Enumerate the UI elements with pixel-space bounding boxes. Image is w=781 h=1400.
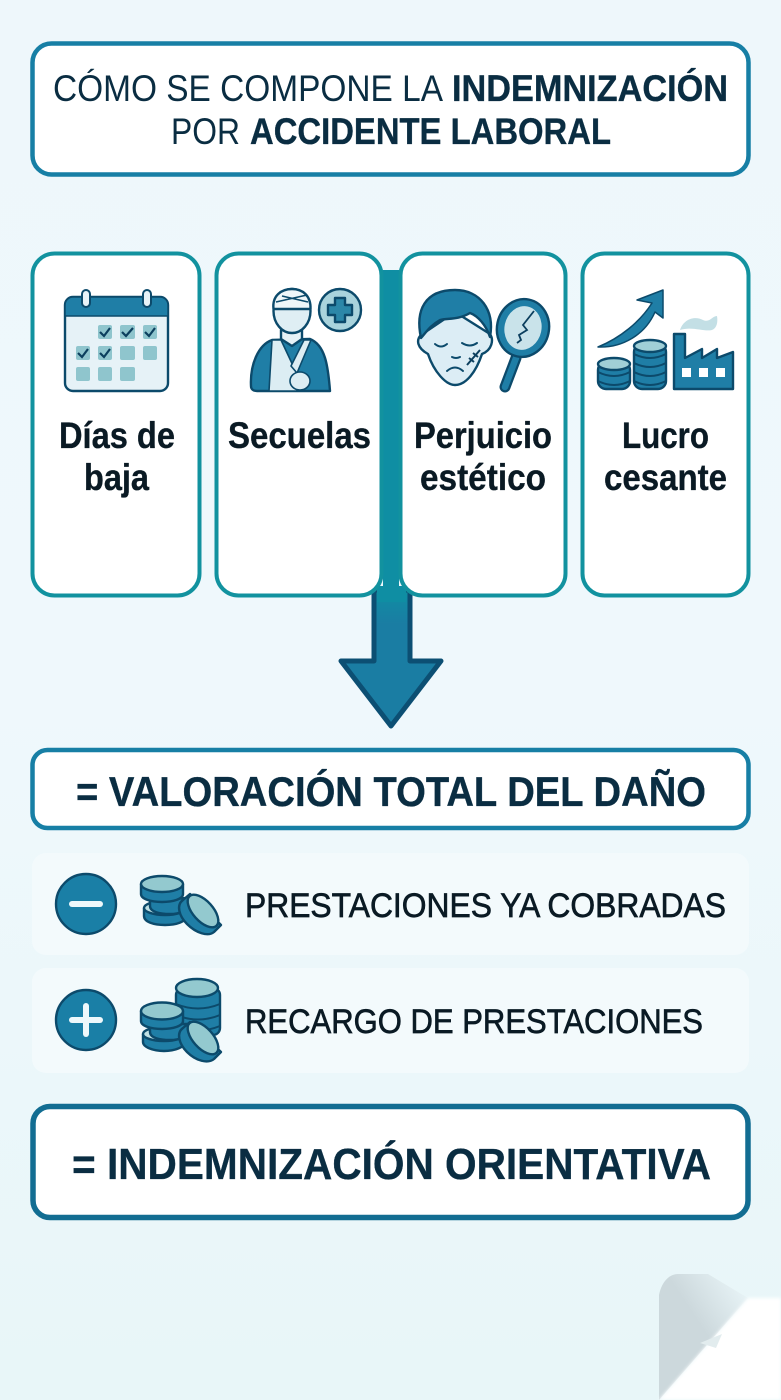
icon: calendar [65,290,168,391]
final compensation box: = INDEMNIZACIÓN ORIENTATIVA [72,1139,711,1189]
icon: coin stacks [141,979,224,1061]
final compensation box [33,1106,748,1218]
card: secuelas [216,254,382,596]
title [32,44,748,174]
title: CÓMO SE COMPONE LA [53,68,443,109]
icon: minus [56,874,116,934]
card: días de baja: baja [84,456,150,498]
row: benefits surcharge [32,968,749,1073]
card: días de baja: Días de [59,414,175,456]
card: lucro cesante [582,254,748,596]
card: secuelas: Secuelas [228,414,371,456]
page curl [659,1274,781,1400]
total damage box [32,750,748,828]
title: INDEMNIZACIÓN [452,67,728,109]
total damage box: = VALORACIÓN TOTAL DEL DAÑO [76,767,706,815]
icon: scarred face and mirror [418,290,554,387]
arrow connecting cards to total [341,270,441,726]
card: lucro cesante: cesante [604,456,727,498]
row: benefits already received [32,853,749,955]
card: perjuicio estético: estético [420,456,546,498]
row: benefits already received: PRESTACIONES YA COBRADAS [245,887,726,925]
card: días de baja [32,254,200,596]
icon: plus [56,990,116,1050]
icon: coins [141,876,224,934]
icon: growth, coins and factory [598,290,733,389]
title: POR [171,111,240,152]
icon: injured person [251,289,361,391]
card: perjuicio estético [400,254,566,596]
title: ACCIDENTE LABORAL [250,111,611,152]
card: perjuicio estético: Perjuicio [414,414,552,456]
row: benefits surcharge: RECARGO DE PRESTACIONES [245,1003,703,1041]
card: lucro cesante: Lucro [622,414,709,456]
